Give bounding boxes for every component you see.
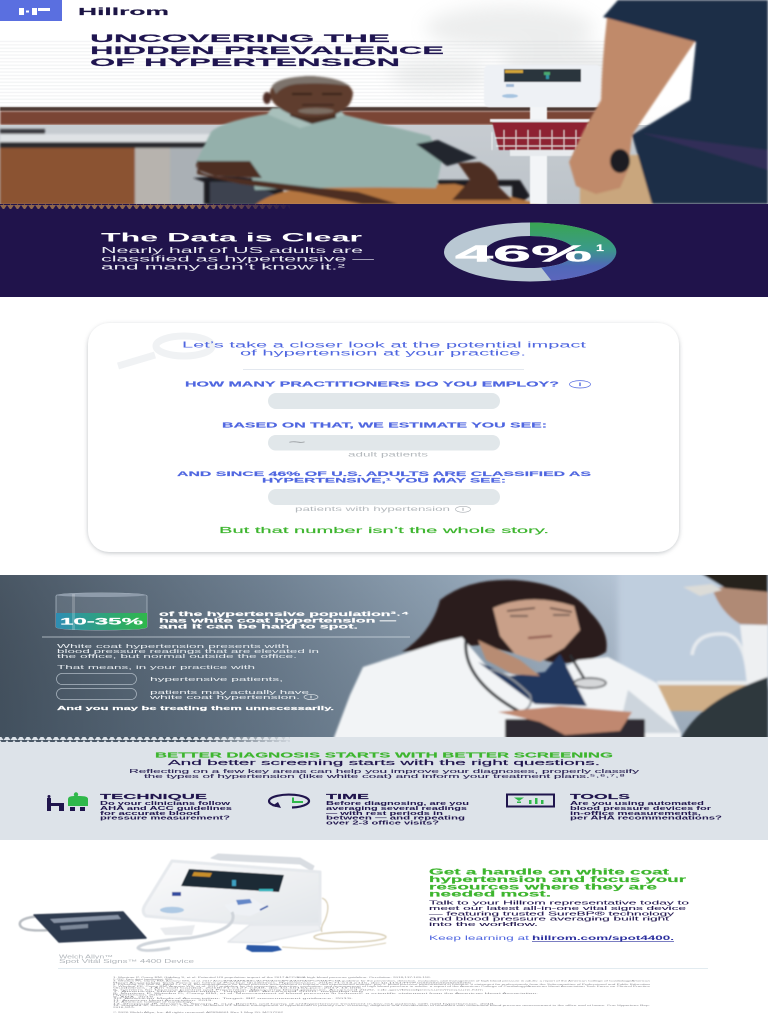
icon: monitor — [507, 794, 554, 806]
photo: vital signs monitor on stand — [484, 65, 601, 204]
text: keep learning link: Keep learning at — [429, 935, 530, 942]
footnotes — [113, 976, 652, 1014]
text: reflecting — [129, 769, 640, 780]
column: time — [269, 792, 469, 826]
title — [90, 33, 445, 69]
caption: device name — [59, 954, 194, 965]
text: nearly half of US adults: classified as hypertensive — — [101, 254, 374, 263]
column: technique — [47, 792, 232, 822]
footnotes: 7. American Heart Association. Target: BP. Accessed 2020. targetbp.org — [113, 990, 364, 993]
label: adult patients: adult patients — [348, 452, 428, 458]
text: technique question — [100, 801, 232, 822]
text: talk to your representative: into the workflow. — [429, 922, 539, 928]
text: technique question: for accurate blood — [100, 811, 200, 817]
chart: 46% donut: 46% — [455, 240, 592, 266]
text: time question: — with rest periods in — [326, 811, 443, 817]
heading: get a handle: hypertension and focus your — [429, 875, 686, 884]
input: adult patients: ~ — [288, 437, 306, 447]
text: technique question: AHA and ACC guidelines — [100, 806, 232, 812]
text: nearly half of US adults: and many don’t know it.² — [101, 263, 346, 272]
photo: seated patient — [193, 76, 540, 205]
input: practitioners — [268, 393, 500, 409]
heading: get a handle: resources where they are — [429, 882, 659, 891]
text: time question: averaging several readings — [326, 806, 467, 812]
text: time question: over 2-3 office visits? — [326, 820, 439, 826]
heading: get a handle: Get a handle on white coat — [429, 868, 670, 877]
question: hypertensive share: HYPERTENSIVE,¹ YOU MAY SEE: — [262, 478, 506, 484]
heading: better diagnosis: BETTER DIAGNOSIS STARTS WITH BETTER SCREENING — [155, 753, 614, 760]
heading: get a handle: needed most. — [429, 890, 551, 899]
caption: device name: Spot Vital Signs™ 4400 Device — [59, 959, 194, 965]
footnotes: Guidelines. J Am Coll Cardiol. 2018;71:e127-e248. doi:10.1016/j.jacc.2017.11.006. — [113, 986, 366, 990]
text: reflecting: Reflecting on a few key areas can help you improve your diagnoses, properly classify — [129, 769, 640, 775]
label: technique: TECHNIQUE — [100, 792, 207, 801]
text: tools question — [570, 801, 722, 822]
text: share with white coat hypertension: of the hypertensive population³˒⁴ — [159, 611, 409, 618]
label: tools: TOOLS — [570, 792, 630, 801]
text: talk to your representative: meet our latest all-in-one vital signs device — [429, 906, 686, 912]
text: tools question: blood pressure devices for — [570, 806, 711, 812]
text: nearly half of US adults: Nearly half of US adults are — [101, 246, 364, 255]
text: definition: the office, but normal outside the office. — [57, 654, 298, 660]
text: definition: That means, in your practice with — [57, 665, 255, 671]
logo: blue box with H mark — [0, 0, 62, 21]
text: time question: Before diagnosing, are you — [326, 801, 469, 807]
footnotes: Heart Association Task Force on Clinical Practice Guidelines. Hypertension. 2018;71:e13-e115. doi:10.1161/HYP.0000000000000065. — [113, 981, 475, 984]
photo: clinic background and patient — [618, 565, 768, 740]
question: hypertensive share: AND SINCE 46% OF U.S. ADULTS ARE CLASSIFIED AS — [177, 471, 592, 478]
text: reflecting: the types of hypertension (like white coat) and inform your treatment plans.⁵˒⁶˒⁷˒⁸ — [144, 774, 625, 780]
heading: get a handle — [429, 868, 686, 899]
photo: doctor in white coat — [333, 580, 681, 740]
footnotes: Hypertension. 2019. — [113, 994, 165, 996]
text: treating unnecessarily: And you may be treating them unnecessarily. — [57, 706, 335, 712]
text: share with white coat hypertension — [159, 611, 409, 630]
panel: better screening — [0, 737, 768, 840]
text: tools question: per AHA recommendations? — [570, 816, 722, 822]
text: time question: between — and repeating — [326, 816, 465, 822]
text: talk to your representative: and blood pressure averaging built right — [429, 917, 670, 923]
panel: white coat hypertension — [0, 565, 768, 740]
icon: patient and clinician — [47, 792, 88, 811]
label: time: TIME — [326, 792, 369, 801]
subheading: right questions: And better screening starts with the right questions. — [168, 758, 600, 767]
footnotes: 13. Sheppard JP, Stevens S, Stevens R, et al. Benefits and harms of antihypertensive treatment in low-risk patients with mild hypertension. 2018. — [113, 1002, 497, 1005]
text: intro: Let’s take a closer look at the potential impact — [182, 341, 588, 350]
title: OF HYPERTENSION — [90, 57, 400, 69]
chart: 46% donut: 1 — [596, 243, 605, 254]
text: tools question: in-office measurements, — [570, 811, 702, 817]
text: definition: White coat hypertension presents with — [57, 644, 289, 650]
panel: hero photo of patient and nurse — [0, 0, 768, 205]
text: talk to your representative: Talk to your Hillrom representative today to — [429, 901, 689, 907]
footnotes: 12. American College of Cardiology. — [113, 1000, 195, 1004]
question: practitioners: HOW MANY PRACTITIONERS DO YOU EMPLOY? — [185, 382, 559, 389]
text: share with white coat hypertension: has white coat hypertension — — [159, 617, 398, 624]
footnotes: 1. Muntner P, Carey RM, Gidding S, et al. Potential US population impact of the 2017 ACC/AHA high blood pressure guideline. Circulation. 2018;137:109-118. — [113, 976, 433, 979]
icon: clock with arrow — [269, 795, 309, 808]
footnotes: 9. AHA. 2019. — [113, 995, 158, 998]
footnotes: 3. Whelton PK, Carey RM, Aronow WS, et al. 2017 ACC/AHA/AAPA/ABC/ACPM/AGS/APhA/ASH/ASPC/NMA/PCNA guideline for the prevention, detection, evaluation, and management of high blood pressure in adults: a report of the American College of Cardiology/American — [113, 980, 650, 982]
footnotes: 11. American Heart Association. 2019. — [113, 999, 215, 1002]
text: nearly half of US adults — [101, 246, 374, 272]
logo: Hillrom wordmark: Hillrom — [78, 6, 169, 18]
text: technique question: Do your clinicians follow — [100, 801, 232, 807]
text: intro: of hypertension at your practice. — [240, 349, 526, 358]
question: hypertensive share — [177, 471, 592, 484]
input: hypertensive patients pill — [56, 674, 136, 684]
text: definition — [57, 644, 319, 671]
question: estimate: BASED ON THAT, WE ESTIMATE YOU SEE: — [222, 423, 547, 430]
title: UNCOVERING THE — [90, 33, 391, 45]
text: definition: blood pressure readings that are elevated in — [57, 649, 319, 655]
chart: 46% donut — [444, 222, 616, 282]
footnotes: 2. CDC. Facts about hypertension. 2020. — [113, 978, 174, 981]
text: keep learning link: hillrom.com/spot4400. — [532, 935, 675, 942]
column: tools — [507, 792, 722, 822]
text: time question — [326, 801, 469, 826]
input: white coat patients pill — [56, 688, 136, 700]
photo: desk at left — [0, 127, 210, 204]
icon: info — [570, 381, 590, 388]
label: white coat patients: white coat hypertension. — [148, 695, 301, 701]
heading: the data is clear: The Data is Clear — [101, 230, 363, 244]
title: HIDDEN PREVALENCE — [90, 45, 445, 57]
input: patients with hypertension — [268, 489, 500, 505]
footnotes: 10. American Medical Association. Target: BP measurement guidance. 2019. — [113, 997, 356, 1000]
text: keep learning link — [429, 935, 675, 942]
label: hypertensive patients: hypertensive patients, — [150, 677, 284, 683]
text: not the whole story: But that number isn’t the whole story. — [219, 525, 549, 535]
text: share with white coat hypertension: and it can be hard to spot. — [159, 623, 359, 630]
footnotes: 8. Muntner P, Shimbo D, Carey RM, et al. Measurement of blood pressure in humans: a scientific statement from the American Heart Association. — [113, 992, 541, 995]
photo: Spot Vital Signs 4400 device — [20, 854, 386, 952]
text: technique question: pressure measurement? — [100, 816, 230, 822]
footnotes: 14. Sheppard JP, Schwartz CL, Tucker KL, McManus RJ. Modern management of hypertension in primary care: screening, diagnosis and consideration of treatment with automated blood pressure measurement in the office and at home. Curr Hypertens Rep. — [113, 1004, 652, 1007]
text: intro — [182, 341, 588, 358]
text: tools question: Are you using automated — [570, 801, 704, 807]
photo: window blinds background — [0, 6, 650, 204]
label: patients with hypertension: patients with hypertension — [295, 507, 450, 513]
caption: device name: Welch Allyn™ — [59, 954, 113, 960]
footnotes: 6. Centers for Disease Control and Prevention. Measuring blood pressure. Accessed 2020. cdc.gov/bloodpressure/measure.htm — [113, 988, 486, 991]
footnotes: 5. Whelton PK, Carey RM, Aronow WS, et al. 2017 guideline for the prevention, detection, evaluation, and management of high blood pressure in adults: a report of the American College of Cardiology/American Heart Association Task Force on Clinical Practice — [113, 985, 650, 988]
footnotes: 4. Pickering TG, Hall JE, Appel LJ, et al. Recommendations for blood pressure measurement in humans and experimental animals: part 1: blood pressure measurement in humans: a statement for professionals from the Subcommittee of Professional and Public Education — [113, 983, 650, 986]
photo: nurse standing at right — [569, 0, 768, 205]
text: talk to your representative — [429, 901, 689, 928]
panel: product section — [0, 840, 768, 1024]
label: white coat patients: patients may actually have — [150, 690, 309, 696]
text: talk to your representative: — featuring trusted SureBP® technology — [429, 910, 674, 917]
panel: practice calculator card — [88, 323, 679, 553]
label: white coat patients — [148, 690, 318, 701]
icon: cylinder with 10-35%: 10-35% — [60, 616, 143, 626]
label: patients with hypertension — [295, 506, 470, 513]
footnotes: © 2020 Welch Allyn, Inc. All rights reserved. APR96601 Rev 1 May 20. MC17202 — [113, 1011, 284, 1014]
panel: the data is clear — [0, 204, 768, 297]
icon: magnifying glass — [118, 336, 212, 366]
footnotes: 2016;18:5. — [113, 1007, 137, 1009]
icon: cylinder with 10-35% — [56, 593, 147, 630]
input: adult patients — [268, 435, 500, 450]
